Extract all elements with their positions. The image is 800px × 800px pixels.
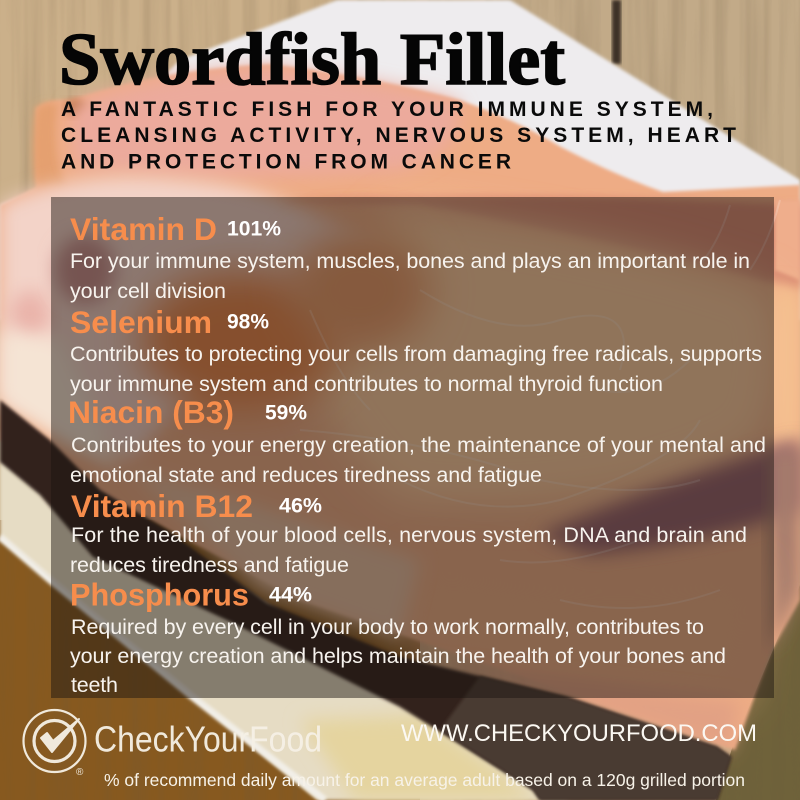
- logo: CheckYourFood: [24, 710, 322, 778]
- nutrient: Vitamin B12: Vitamin B12: [71, 488, 253, 524]
- nutrient: Selenium: your immune system and contributes to normal thyroid function: [70, 372, 663, 396]
- nutrient: Phosphorus: teeth: [71, 673, 118, 697]
- nutrient: Vitamin D: your cell division: [70, 279, 226, 303]
- nutrient: Niacin (B3): Contributes to your energy creation, the maintenance of your mental and: [71, 433, 766, 457]
- nutrient: Niacin (B3): emotional state and reduces tiredness and fatigue: [70, 463, 542, 487]
- nutrient: Vitamin B12: For the health of your blood cells, nervous system, DNA and brain and: [71, 523, 747, 547]
- nutrient: Vitamin B12: reduces tiredness and fatigue: [70, 553, 349, 577]
- nutrient: Selenium: Contributes to protecting your cells from damaging free radicals, supports: [70, 342, 762, 366]
- subtitle: CLEANSING ACTIVITY, NERVOUS SYSTEM, HEART: [61, 124, 736, 147]
- nutrient: Niacin (B3): 59%: [265, 402, 307, 424]
- nutrient: Vitamin D: [70, 211, 750, 303]
- subtitle: AND PROTECTION FROM CANCER: [61, 150, 511, 174]
- footnote: % of recommend daily amount for an average adult based on a 120g grilled portion: [104, 770, 745, 790]
- nutrient: Niacin (B3): Niacin (B3): [68, 394, 234, 430]
- logo: CheckYourFood: CheckYourFood: [94, 718, 322, 760]
- nutrient: Selenium: 98%: [227, 310, 269, 334]
- nutrient: Vitamin D: For your immune system, muscles, bones and plays an important role in: [70, 249, 750, 273]
- title: Swordfish Fillet: [59, 19, 565, 101]
- icon: check mark in circles: [24, 710, 86, 772]
- logo: CheckYourFood: ®: [76, 767, 84, 778]
- dark translucent text panel: [51, 197, 774, 698]
- nutrient: Phosphorus: 44%: [269, 584, 312, 606]
- nutrient: Phosphorus: [70, 576, 726, 697]
- nutrient: Selenium: [70, 304, 762, 396]
- subtitle: [61, 98, 736, 174]
- nutrient: Niacin (B3): [68, 394, 766, 487]
- nutrient: Phosphorus: Required by every cell in your body to work normally, contributes to: [71, 615, 704, 639]
- website address: WWW.CHECKYOURFOOD.COM: [401, 720, 757, 747]
- nutrient: Vitamin D: Vitamin D: [70, 211, 217, 247]
- subtitle: A FANTASTIC FISH FOR YOUR IMMUNE SYSTEM,: [61, 98, 713, 121]
- nutrient: Phosphorus: Phosphorus: [70, 576, 249, 612]
- nutrient: Vitamin B12: [70, 488, 747, 577]
- nutrient: Selenium: Selenium: [70, 304, 212, 340]
- nutrient: Phosphorus: your energy creation and helps maintain the health of your bones and: [70, 644, 726, 668]
- nutrient: Vitamin B12: 46%: [279, 494, 322, 518]
- nutrient: Vitamin D: 101%: [227, 218, 281, 240]
